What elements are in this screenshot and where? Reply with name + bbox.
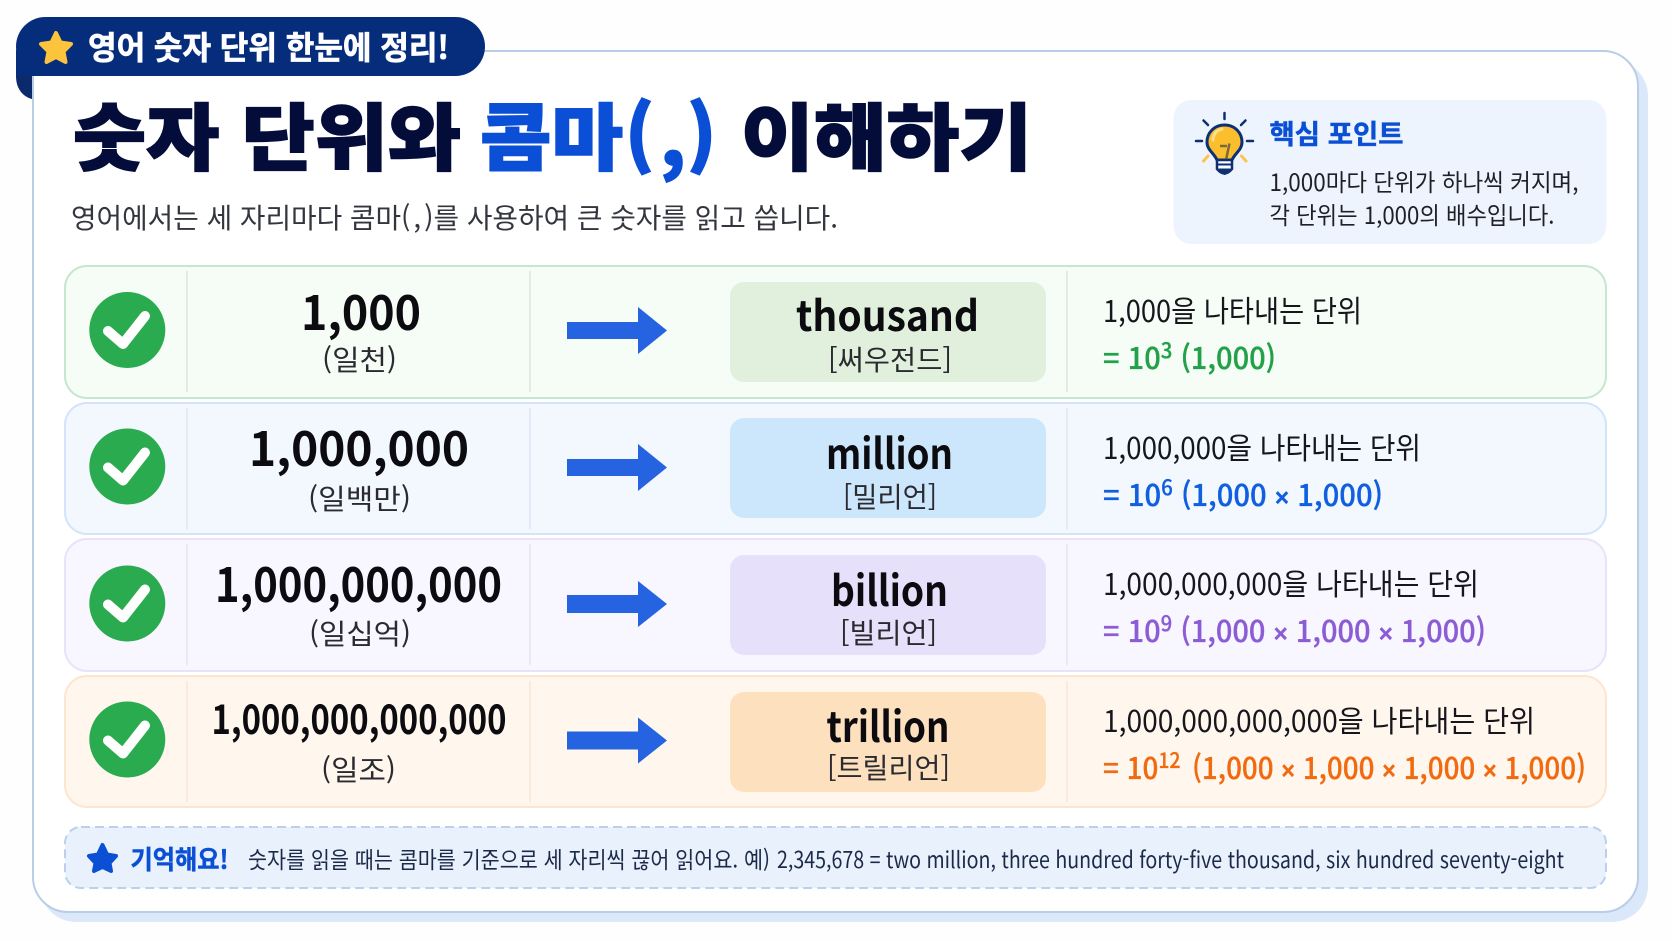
banner text: 영어 숫자 단위 한눈에 정리! bbox=[88, 23, 449, 69]
icon: blue star bbox=[89, 845, 116, 871]
title: ) bbox=[687, 80, 716, 186]
word pill: million bbox=[826, 421, 953, 482]
description: 9 bbox=[1161, 608, 1172, 638]
callout: remember bbox=[65, 827, 1606, 888]
description: = 10 bbox=[1103, 744, 1163, 788]
word pill: trillion bbox=[826, 694, 950, 755]
description: (1,000) bbox=[1172, 334, 1276, 378]
number: 1,000 bbox=[301, 275, 421, 344]
word pill bbox=[730, 692, 1046, 792]
word pill: [트릴리언] bbox=[827, 747, 950, 787]
description: 1,000,000을 나타내는 단위 bbox=[1103, 424, 1421, 468]
arrow bbox=[567, 581, 667, 627]
title: 숫자 단위와 bbox=[73, 80, 461, 186]
description bbox=[1103, 560, 1486, 651]
word pill: [써우전드] bbox=[828, 339, 952, 379]
row: thousand bbox=[65, 266, 1606, 398]
number: 1,000,000,000,000 bbox=[212, 688, 506, 746]
description: 1,000을 나타내는 단위 bbox=[1103, 287, 1362, 331]
callout heading: 기억해요! bbox=[130, 840, 228, 877]
panel: key point bbox=[1174, 100, 1606, 244]
heading banner bbox=[16, 17, 485, 99]
key point heading: 핵심 포인트 bbox=[1270, 113, 1404, 152]
icon: check bbox=[89, 702, 165, 778]
description: = 10 bbox=[1103, 471, 1163, 515]
number: 1,000,000 bbox=[249, 411, 469, 480]
description bbox=[1103, 424, 1421, 515]
word pill: [밀리언] bbox=[843, 476, 937, 516]
word pill bbox=[730, 418, 1046, 518]
key point body: 각 단위는 1,000의 배수입니다. bbox=[1270, 196, 1554, 231]
title: , bbox=[660, 80, 686, 186]
row: billion bbox=[65, 539, 1606, 671]
description bbox=[1103, 287, 1362, 378]
word pill bbox=[730, 282, 1046, 382]
icon: banner star bbox=[41, 33, 71, 62]
title bbox=[73, 80, 1032, 186]
arrow bbox=[567, 307, 667, 354]
callout text: 숫자를 읽을 때는 콤마를 기준으로 세 자리씩 끊어 읽어요. 예) bbox=[248, 841, 770, 875]
description: (1,000 × 1,000) bbox=[1181, 471, 1386, 515]
description bbox=[1103, 697, 1586, 788]
icon: check bbox=[89, 428, 165, 504]
word pill: billion bbox=[831, 558, 948, 619]
description: 1,000,000,000을 나타내는 단위 bbox=[1103, 560, 1479, 604]
arrow bbox=[567, 444, 667, 491]
description: (1,000 × 1,000 × 1,000 × 1,000) bbox=[1193, 744, 1593, 788]
description: 3 bbox=[1161, 335, 1172, 365]
icon: light bulb bbox=[1196, 113, 1253, 174]
row: million bbox=[65, 403, 1606, 534]
description: 6 bbox=[1161, 472, 1173, 502]
arrow bbox=[567, 718, 667, 764]
word pill bbox=[730, 555, 1046, 655]
icon: check bbox=[89, 566, 165, 642]
key point body: 1,000마다 단위가 하나씩 커지며, bbox=[1270, 163, 1578, 198]
subtitle: 영어에서는 세 자리마다 콤마(,)를 사용하여 큰 숫자를 읽고 씁니다. bbox=[71, 197, 838, 237]
callout text bbox=[248, 841, 1564, 875]
korean reading: (일조) bbox=[321, 749, 396, 789]
title: ( bbox=[625, 80, 654, 186]
row: trillion bbox=[65, 676, 1606, 807]
number: 1,000,000,000 bbox=[215, 547, 502, 616]
word pill: [빌리언] bbox=[840, 612, 937, 652]
description: 12 bbox=[1158, 745, 1181, 775]
description: = 10 bbox=[1103, 607, 1163, 651]
word pill: thousand bbox=[796, 283, 979, 344]
icon: check bbox=[89, 292, 165, 368]
title: 이해하기 bbox=[741, 80, 1032, 186]
description: = 10 bbox=[1103, 334, 1163, 378]
korean reading: (일십억) bbox=[309, 613, 411, 653]
description: (1,000 × 1,000 × 1,000) bbox=[1181, 607, 1489, 651]
korean reading: (일천) bbox=[322, 339, 397, 379]
description: 1,000,000,000,000을 나타내는 단위 bbox=[1103, 697, 1535, 741]
callout text: 2,345,678 = two million, three hundred forty-five thousand, six hundred seventy-eight bbox=[777, 841, 1564, 875]
korean reading: (일백만) bbox=[308, 478, 411, 518]
key point body bbox=[1270, 163, 1578, 231]
title: 콤마 bbox=[480, 80, 623, 186]
